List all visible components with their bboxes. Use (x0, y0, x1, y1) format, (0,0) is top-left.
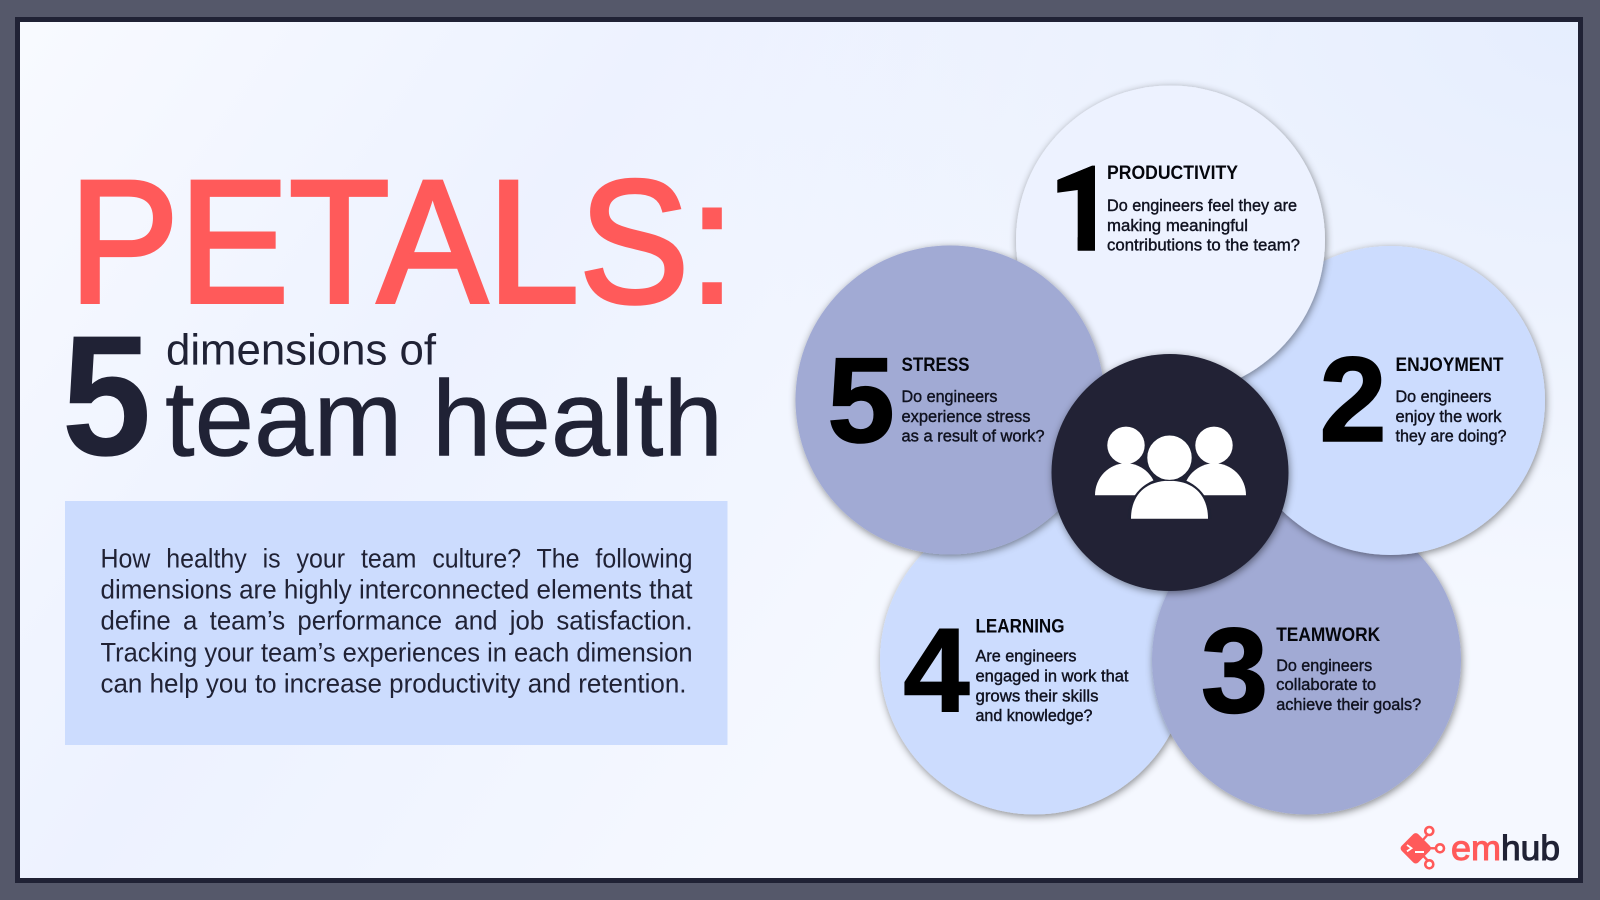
team health: team health (165, 358, 723, 479)
petal 4: learning (880, 506, 1189, 814)
petal 5: stress (796, 246, 1104, 554)
text: learning: grows their skills (976, 688, 1098, 706)
text: learning: LEARNING (976, 616, 1064, 638)
text: productivity: making meaningful (1107, 217, 1248, 235)
big numeral 5: 5 (62, 300, 152, 492)
logo: emhub (1399, 827, 1560, 868)
description text: How healthy is your team culture? The following (100, 544, 692, 574)
dimensions of: dimensions of (166, 325, 437, 374)
text: productivity (1057, 166, 1300, 251)
text: productivity: contributions to the team? (1107, 237, 1300, 255)
text: learning: and knowledge? (976, 707, 1092, 725)
wordmark: hub (1501, 829, 1560, 868)
description text: dimensions are highly interconnected elements that (100, 574, 693, 604)
text: teamwork: achieve their goals? (1276, 696, 1421, 714)
text: teamwork: TEAMWORK (1276, 624, 1381, 646)
text: enjoyment: Do engineers (1396, 388, 1492, 406)
subtitle: 5 dimensions of team health (62, 300, 723, 492)
petal 2: enjoyment (1236, 246, 1545, 555)
text: teamwork: 3 (1201, 602, 1268, 738)
text: stress: experience stress (902, 408, 1030, 426)
text: enjoyment: they are doing? (1396, 428, 1506, 446)
text: teamwork: Do engineers (1276, 657, 1372, 675)
description text: Tracking your team’s experiences in each dimension (100, 638, 692, 668)
panel: description (65, 501, 728, 745)
title: PETALS: PETALS: (69, 145, 735, 340)
text: teamwork (1201, 602, 1421, 738)
petal 3: teamwork (1152, 506, 1461, 814)
description text: can help you to increase productivity and retention. (100, 668, 686, 698)
icon: logo network mark (1399, 827, 1444, 868)
text: enjoyment: ENJOYMENT (1396, 354, 1504, 376)
description text: define a team’s performance and job satisfaction. (100, 606, 692, 636)
text: learning (903, 604, 1129, 737)
icon: team of three people (1095, 427, 1246, 519)
text: learning: engaged in work that (976, 668, 1129, 686)
text: productivity: PRODUCTIVITY (1107, 162, 1238, 184)
text: stress: as a result of work? (902, 428, 1044, 446)
text: productivity: Do engineers feel they are (1107, 197, 1297, 215)
text: stress: Do engineers (902, 388, 998, 406)
text: productivity: 1 (1050, 139, 1118, 277)
center hub with people icon (1052, 354, 1288, 591)
text: stress: STRESS (902, 354, 970, 376)
text: stress: 5 (827, 332, 895, 468)
text: enjoyment (1319, 331, 1506, 467)
text: stress (827, 332, 1044, 468)
text: enjoyment: 2 (1319, 331, 1387, 467)
wordmark: em (1451, 829, 1501, 868)
petal 1: productivity (1016, 86, 1325, 394)
description text (100, 544, 693, 698)
text: enjoyment: enjoy the work (1396, 408, 1502, 426)
text: learning: 4 (903, 604, 970, 737)
text: teamwork: collaborate to (1276, 676, 1376, 694)
text: learning: Are engineers (976, 648, 1076, 666)
